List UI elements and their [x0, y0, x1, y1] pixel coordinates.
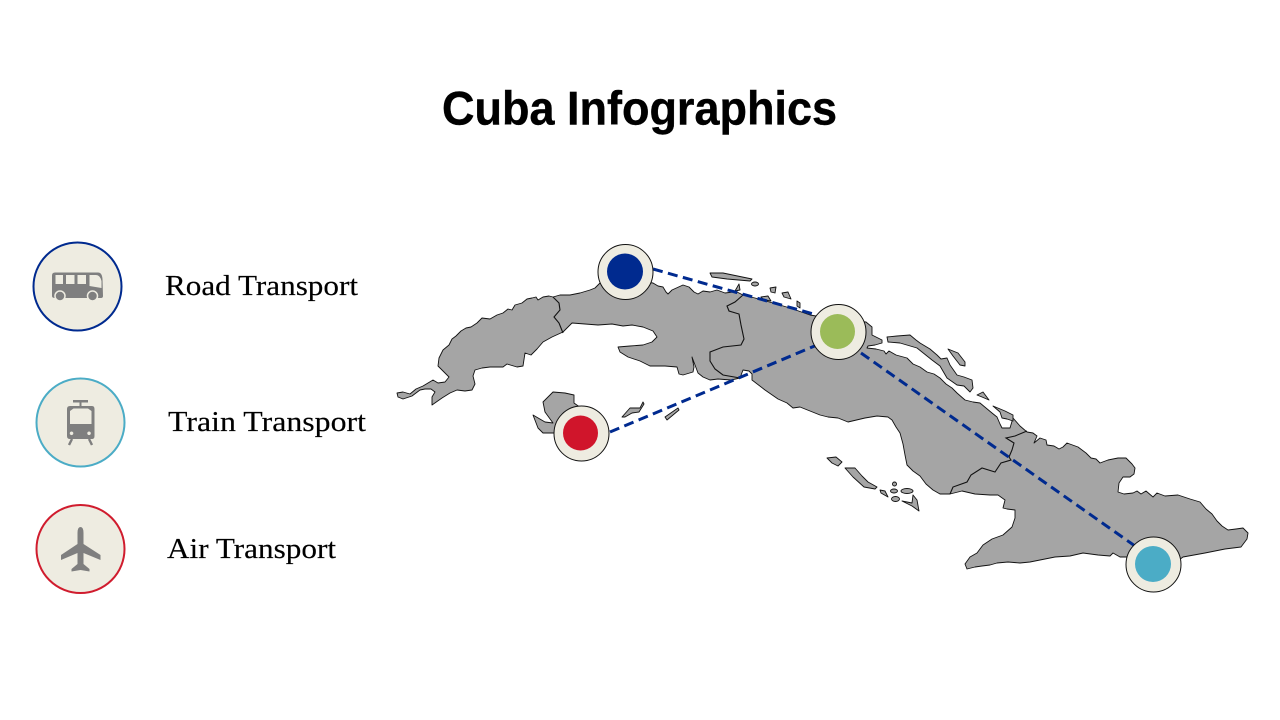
title: Cuba Infographics	[442, 81, 837, 134]
icon: bus	[34, 242, 122, 330]
marker: teal	[1126, 537, 1181, 592]
label: air transport: Air Transport	[167, 533, 336, 565]
label: road transport: Road Transport	[165, 270, 358, 302]
southern and northern keys	[622, 273, 1013, 511]
dashed route lines	[610, 269, 1135, 546]
icon: airplane	[36, 505, 124, 593]
map of Cuba	[397, 273, 1248, 569]
legend: road transport	[34, 242, 358, 330]
main island	[397, 280, 1248, 569]
marker: green	[811, 304, 866, 360]
provincial borders	[553, 295, 1027, 494]
icon: tram	[36, 378, 124, 466]
marker: red	[554, 406, 609, 461]
legend: air transport	[36, 505, 336, 593]
marker: blue	[598, 244, 653, 300]
Isla de la Juventud	[533, 392, 581, 433]
label: train transport: Train Transport	[168, 406, 366, 438]
legend: train transport	[36, 378, 366, 466]
